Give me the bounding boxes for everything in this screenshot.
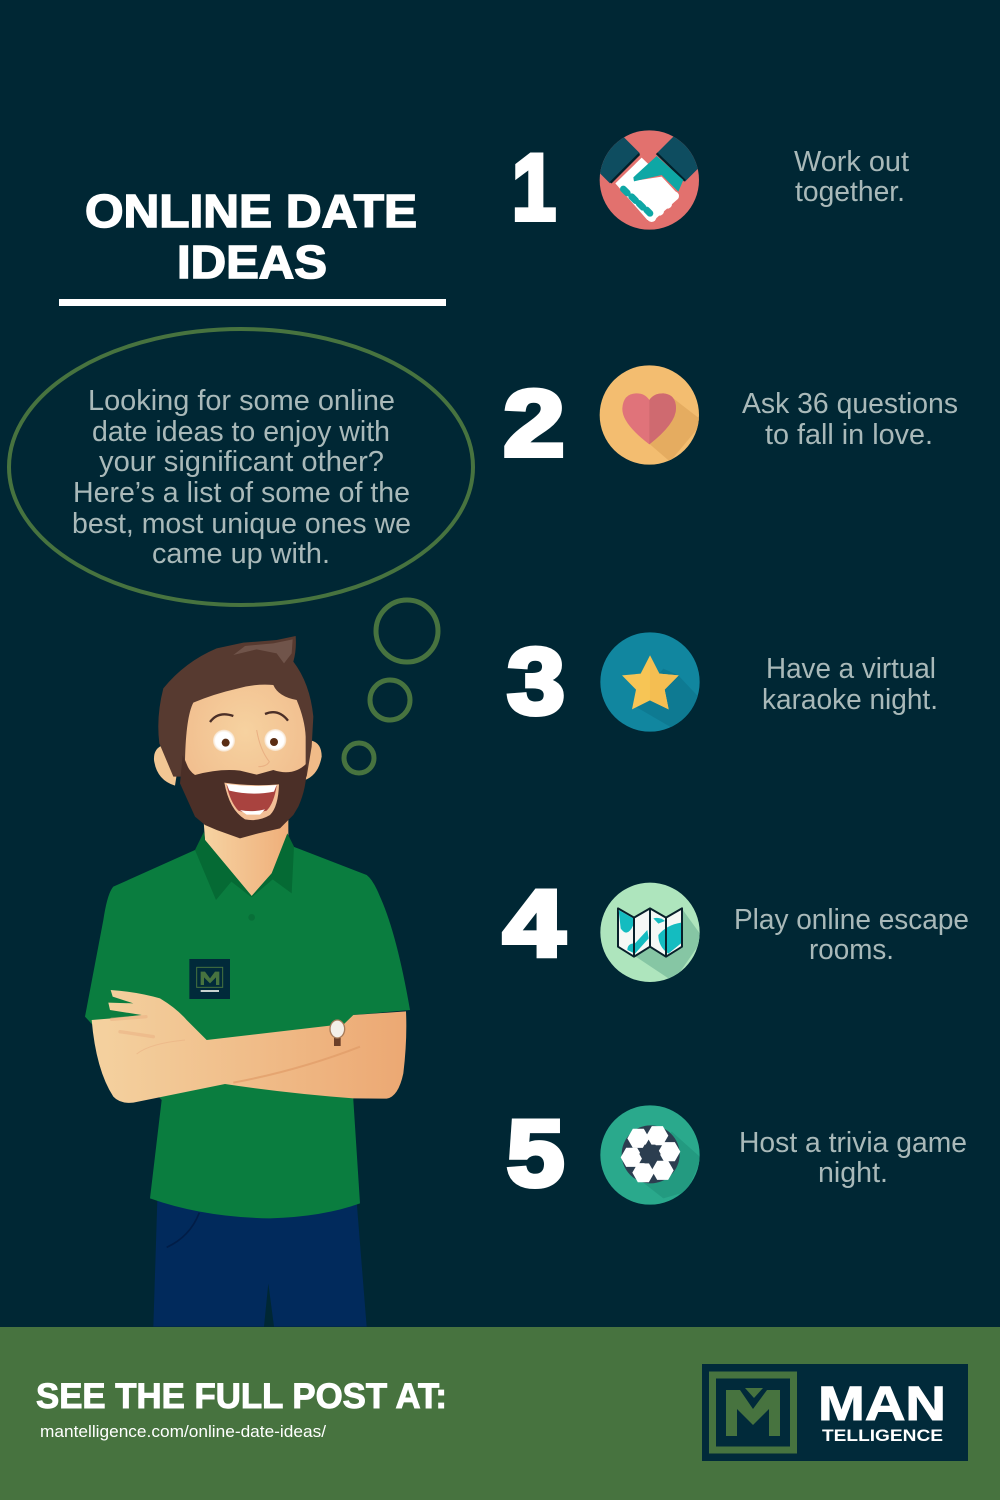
footer heading: SEE THE FULL POST AT: [36,1377,447,1416]
text 2 [742,388,958,451]
intro text: Here’s a list of some of the [73,477,410,509]
text 2: to fall in love. [765,419,933,451]
head [154,636,322,838]
footer url: mantelligence.com/online-date-ideas/ [40,1422,326,1441]
text 2: Ask 36 questions [742,388,958,420]
character: man in green polo [85,636,410,1327]
crossed arms [92,990,406,1103]
item 4 [502,882,968,982]
icon: star [600,632,703,732]
text 3 [762,653,938,716]
face [185,685,306,820]
shirt badge [189,959,230,999]
icon: handshake [600,130,699,230]
logo: TELLIGENCE [822,1426,943,1445]
title [59,185,446,306]
intro text: your significant other? [99,446,384,478]
number 2: 2 [503,370,565,476]
item 2 [503,365,958,476]
icon: soccer ball [600,1105,702,1205]
mouth [224,783,279,820]
intro text: best, most unique ones we [72,508,411,540]
wristwatch [330,1020,345,1046]
number 4: 4 [503,870,565,976]
intro text: came up with. [152,538,330,570]
intro text [72,385,411,570]
number 5: 5 [507,1101,564,1205]
item 5 [507,1101,967,1205]
thought bubble [9,329,473,605]
icon: heart [600,365,703,465]
trousers [153,1200,367,1327]
title: ONLINE DATE [85,185,417,237]
logo [702,1364,968,1461]
number 3: 3 [507,629,565,733]
hair [158,636,313,777]
logo: MAN [818,1378,946,1431]
eyebrows [210,712,288,722]
white hand [615,158,679,222]
neck [203,817,288,896]
text 3: Have a virtual [766,653,936,685]
collar [195,832,294,900]
text 1: Work out [794,146,909,178]
icon: map [600,883,703,982]
number 1: 1 [512,135,556,240]
footer band [0,1327,1000,1500]
text 1 [794,146,909,208]
eyes [213,729,286,752]
intro text: Looking for some online [88,385,395,417]
text 5 [739,1127,967,1189]
text 4: Play online escape [734,904,969,936]
text 3: karaoke night. [762,684,938,716]
item 3 [507,629,938,733]
body [85,817,410,1327]
beard [180,755,307,838]
text 5: Host a trivia game [739,1127,967,1159]
thought circles [344,600,438,773]
intro text: date ideas to enjoy with [92,416,390,448]
text 5: night. [818,1157,888,1189]
title: IDEAS [177,236,327,288]
text 1: together. [795,176,905,208]
text 4: rooms. [809,934,894,966]
ears [154,745,180,786]
shirt [85,847,410,1218]
text 4 [734,904,969,966]
item 1 [512,130,909,240]
